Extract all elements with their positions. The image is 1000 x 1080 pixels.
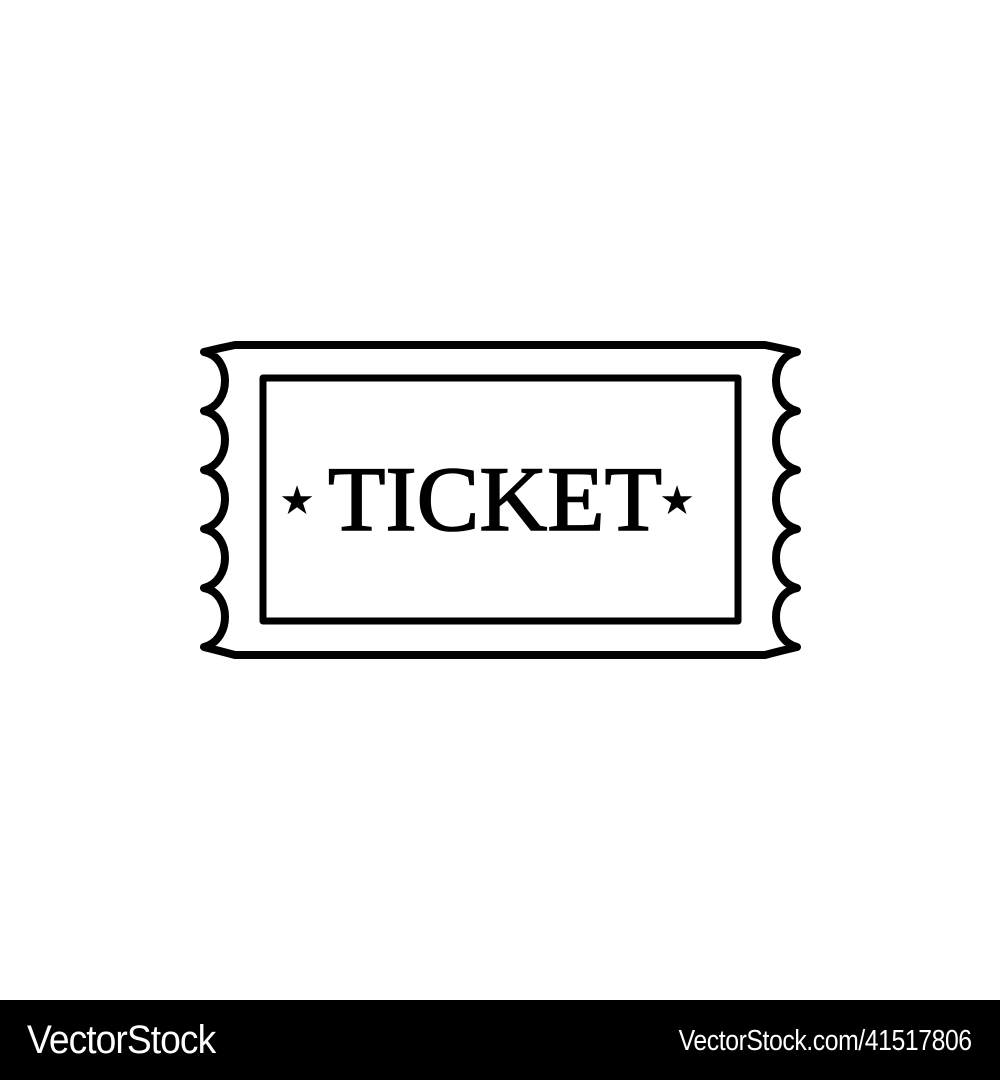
ticket text: ★ bbox=[659, 478, 695, 524]
ticket text: TICKET bbox=[328, 448, 662, 550]
footer id: VectorStock.com/41517806 bbox=[679, 1025, 972, 1057]
ticket outline bbox=[204, 345, 797, 655]
footer bar bbox=[0, 1000, 1000, 1080]
ticket text: ★ bbox=[279, 478, 315, 524]
footer logo: VectorStock bbox=[27, 1018, 215, 1062]
